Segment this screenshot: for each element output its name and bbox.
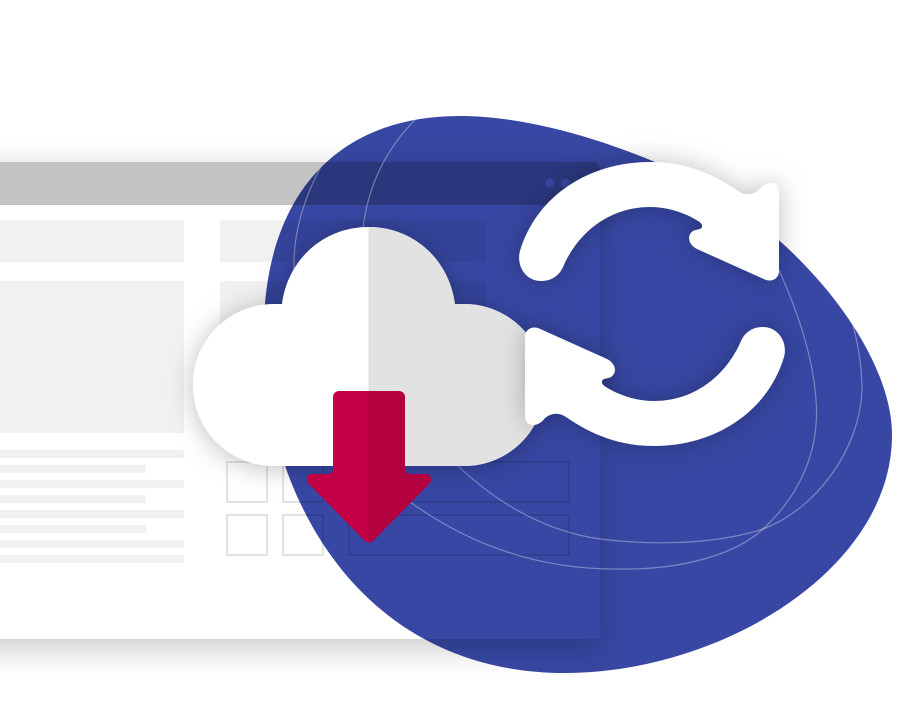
right column placeholders	[220, 220, 486, 433]
top sync arrow	[519, 162, 779, 281]
cloud icon	[193, 227, 545, 466]
window control dots	[545, 178, 586, 188]
sync arrows	[519, 162, 785, 446]
window body	[0, 162, 600, 639]
blue blob	[263, 116, 892, 673]
window shadow	[0, 167, 600, 651]
cloud grey half	[368, 227, 535, 466]
arrow right half	[368, 391, 431, 542]
browser window	[0, 162, 600, 651]
thin orbit lines	[294, 120, 862, 569]
window title bar	[0, 162, 600, 205]
cloud white half	[193, 227, 545, 466]
left column placeholders	[0, 220, 184, 563]
bottom sync arrow	[525, 327, 785, 446]
illustration: cloud download and sync	[0, 116, 892, 673]
download arrow	[307, 391, 431, 542]
form field outlines	[227, 462, 569, 555]
arrow left half	[307, 391, 368, 542]
